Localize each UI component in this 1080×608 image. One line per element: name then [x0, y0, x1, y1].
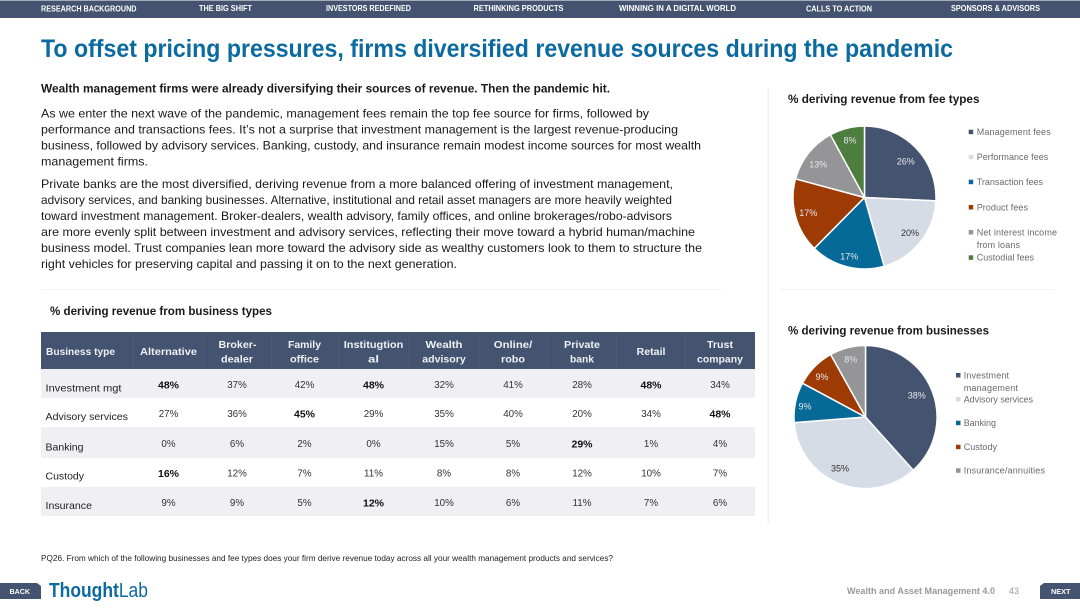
legend: businesses: management [964, 383, 1018, 393]
legend: fee types: Product fees [977, 202, 1028, 212]
row: Investment mgt: 37% [227, 380, 247, 391]
navigation bar: INVESTORS REDEFINED [326, 4, 411, 13]
row: Custody: 16% [158, 468, 180, 480]
back button [0, 583, 41, 599]
paragraph two: Private banks are the most diversified, deriving revenue from a more balanced offering of investment management, [41, 177, 673, 191]
row: Investment mgt: 34% [710, 380, 730, 391]
table header row: Alternative [140, 346, 197, 358]
row: Insurance: 9% [161, 498, 176, 509]
navigation bar: RESEARCH BACKGROUND [41, 4, 137, 14]
row: Banking: 1% [644, 439, 658, 450]
row: Advisory services: 35% [434, 409, 454, 420]
logo: ThoughtLab: ThoughtLab [49, 580, 148, 602]
lead sentence: Wealth management firms were already diversifying their sources of revenue. Then the pandemic hit. [41, 82, 610, 96]
row: Banking: 4% [713, 439, 727, 450]
row: Custody: Custody [46, 470, 85, 482]
next button: NEXT [1051, 587, 1071, 596]
navigation bar: CALLS TO ACTION [806, 4, 872, 14]
table header row: office [290, 354, 319, 366]
row: Insurance [41, 487, 755, 516]
legend: businesses: Investment [964, 370, 1009, 380]
table header row [41, 332, 755, 369]
table header row: Wealth [426, 339, 462, 351]
row: Banking [41, 427, 755, 458]
navigation bar: WINNING IN A DIGITAL WORLD [619, 4, 736, 13]
paragraph one: As we enter the next wave of the pandemic, management fees remain the top fee source for firms, followed by [41, 106, 649, 120]
legend: fee types: from loans [977, 240, 1020, 250]
row: Investment mgt: 41% [503, 380, 523, 391]
pie chart: businesses [794, 345, 937, 489]
row: Advisory services: 34% [641, 409, 661, 420]
navigation bar [0, 0, 1080, 18]
row: Advisory services: 29% [364, 409, 384, 420]
table header row: robo [501, 354, 525, 366]
table header row: Family [288, 339, 321, 351]
row: Investment mgt: 48% [640, 380, 662, 392]
pie labels: fee types: 13% [809, 160, 827, 170]
legend: fee types: Performance fees [977, 152, 1049, 162]
paragraph two [41, 177, 702, 271]
table heading: % deriving revenue from business types [50, 304, 272, 318]
row: Custody: 12% [227, 468, 247, 480]
paragraph one: performance and transactions fees. It’s not a surprise that investment management is the largest revenue-producing [41, 122, 678, 136]
row: Advisory services: 40% [503, 409, 523, 420]
row: Insurance: 7% [644, 498, 658, 509]
paragraph one: management firms. [41, 154, 148, 168]
paragraph two: business model. Trust companies lean more toward the advisory side as wealthy customers look to them to structure the [41, 241, 702, 255]
row: Custody: 7% [713, 468, 727, 480]
row: Banking: 15% [434, 439, 454, 450]
legend: fee types: Transaction fees [977, 177, 1044, 187]
row: Insurance: 5% [297, 498, 312, 509]
legend: fee types: Net interest income [977, 227, 1057, 237]
paragraph two: are more evenly split between investment and advisory services, reflecting their move toward a hybrid human/machine [41, 225, 695, 239]
table header row: company [697, 354, 743, 366]
row: Custody: 8% [506, 468, 520, 480]
paragraph two: toward investment management. Broker-dealers, wealth advisory, family offices, and online brokerages/robo-advisors [41, 209, 672, 223]
pie labels: fee types: 8% [843, 135, 857, 145]
paragraph two: right vehicles for preserving capital and passing it on to the next generation. [41, 257, 457, 271]
table header row: Private [564, 339, 600, 351]
row: Advisory services: Advisory services [46, 411, 128, 423]
row: Custody: 8% [437, 468, 451, 480]
chart heading: fee types: % deriving revenue from fee types [788, 92, 980, 106]
row: Insurance: 10% [434, 498, 454, 509]
pie labels: businesses: 35% [831, 464, 849, 474]
paragraph one [41, 106, 701, 168]
row: Banking: 6% [230, 439, 244, 450]
row: Banking: Banking [46, 442, 84, 454]
row: Advisory services: 45% [294, 408, 316, 420]
back button: BACK [10, 587, 31, 596]
pie labels: fee types: 17% [799, 208, 817, 218]
legend: fee types: Custodial fees [977, 253, 1034, 263]
row: Insurance: 12% [363, 498, 385, 510]
row: Custody: 10% [641, 468, 661, 480]
row: Insurance: 6% [506, 498, 520, 509]
row: Custody: 7% [297, 468, 312, 480]
row: Advisory services: 20% [572, 409, 592, 420]
row: Advisory services: 27% [159, 409, 179, 420]
table header row: Broker- [218, 339, 257, 351]
pie labels: fee types: 17% [840, 252, 858, 262]
row: Investment mgt: Investment mgt [46, 382, 122, 394]
legend: fee types [969, 127, 1057, 263]
chart heading: businesses: % deriving revenue from businesses [788, 324, 989, 338]
row: Banking: 29% [571, 438, 593, 450]
pie labels: fee types [799, 135, 919, 262]
pie labels: fee types: 26% [897, 156, 915, 166]
row: Investment mgt: 28% [572, 380, 592, 391]
row: Custody [46, 468, 727, 482]
pie labels: businesses: 9% [815, 372, 829, 382]
legend: businesses [956, 370, 1046, 476]
legend: businesses: Advisory services [964, 394, 1034, 404]
pie labels: businesses: 8% [844, 354, 857, 364]
row: Advisory services: 48% [709, 408, 731, 420]
row: Investment mgt: 48% [363, 380, 385, 392]
page number: 43 [1009, 586, 1019, 596]
title: To offset pricing pressures, firms diversified revenue sources during the pandemic [41, 35, 953, 63]
table header row: bank [570, 354, 594, 366]
paragraph one: business, followed by advisory services. Banking, custody, and insurance remain modest income sources for most wealth [41, 138, 701, 152]
row: Insurance: 9% [230, 498, 244, 509]
pie labels: businesses: 38% [908, 391, 926, 401]
row: Banking: 0% [161, 439, 176, 450]
legend: businesses: Banking [964, 418, 996, 428]
row: Advisory services: 36% [227, 409, 247, 420]
table header row: Business type [46, 346, 115, 358]
pie chart: fee types [793, 126, 936, 269]
table: revenue from business types [41, 332, 755, 516]
footer report name: Wealth and Asset Management 4.0 [847, 586, 995, 596]
table header row: Trust [707, 339, 734, 351]
row: Custody: 12% [572, 468, 592, 480]
legend: businesses: Insurance/annuities [964, 466, 1046, 476]
table header row: dealer [221, 354, 253, 366]
row: Investment mgt: 48% [158, 380, 180, 392]
row: Banking: 2% [297, 439, 312, 450]
navigation bar: THE BIG SHIFT [199, 4, 252, 13]
pie labels: fee types: 20% [901, 228, 919, 238]
paragraph two: advisory services, and banking businesses. Alternative, institutional and retail asset managers are more heavily weighted [41, 193, 672, 207]
row: Banking: 0% [366, 439, 381, 450]
navigation bar: RETHINKING PRODUCTS [474, 4, 564, 13]
row: Insurance: 6% [713, 498, 727, 509]
row: Investment mgt: 32% [434, 380, 454, 391]
next button [1040, 583, 1080, 599]
table header row: Online/ [494, 339, 532, 351]
pie labels: businesses: 9% [798, 402, 812, 412]
row: Custody: 11% [364, 468, 383, 480]
table header row: Retail [636, 346, 666, 358]
row: Insurance: 11% [573, 498, 592, 509]
footnote: PQ26. From which of the following businesses and fee types does your firm derive revenue today across all your wealth management products and services? [41, 554, 614, 563]
row: Banking: 5% [506, 439, 520, 450]
table header row: advisory [422, 354, 466, 366]
pie labels: businesses [798, 354, 926, 474]
row: Advisory services [46, 408, 731, 423]
legend: businesses: Custody [964, 442, 998, 452]
table header row: al [368, 354, 379, 366]
table header row: Institugtion [344, 339, 403, 351]
row: Investment mgt: 42% [295, 380, 315, 391]
navigation bar: SPONSORS & ADVISORS [951, 4, 1041, 13]
row: Investment mgt [41, 369, 755, 398]
text block: introduction [41, 82, 702, 271]
row: Insurance: Insurance [46, 500, 92, 512]
legend: fee types: Management fees [977, 127, 1051, 137]
